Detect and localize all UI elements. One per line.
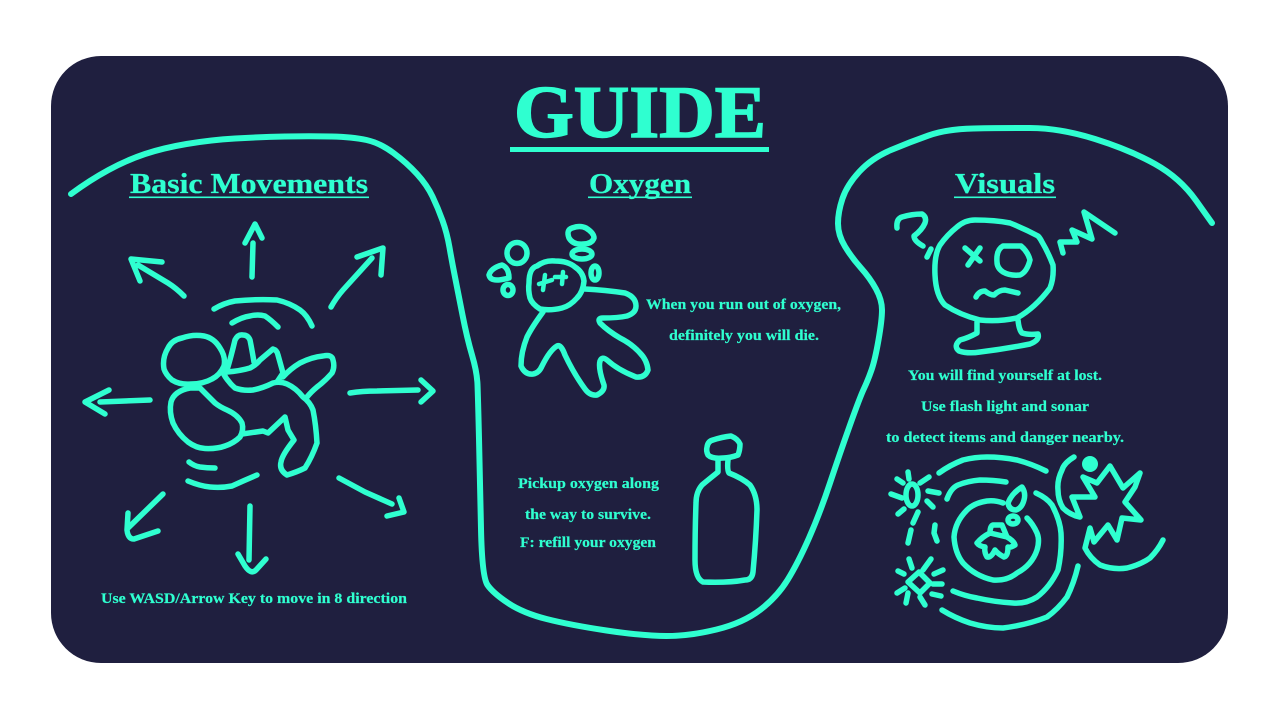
flashlight item [891, 472, 939, 543]
arrow: up-left [131, 259, 184, 296]
caption: out of oxygen: When you run out of oxygen, [646, 297, 841, 313]
arrow: up-right [331, 248, 383, 307]
heading: Oxygen: Oxygen [589, 168, 691, 200]
caption: out of oxygen [646, 297, 841, 344]
bubbles [489, 226, 599, 296]
stand [956, 320, 1038, 353]
caption: pickup oxygen [518, 476, 660, 551]
icon: drowned figure with bubbles [489, 226, 648, 395]
panel: basic movements [85, 168, 433, 607]
arrow: left [85, 390, 150, 414]
figure eyes [539, 272, 566, 290]
mouth [976, 290, 1018, 297]
icon: sonar scene [891, 456, 1163, 628]
icon: swimming diver [164, 300, 334, 487]
eyes [965, 246, 1030, 275]
panel: oxygen [489, 168, 841, 582]
scribble [1060, 212, 1115, 253]
diver body [170, 388, 243, 449]
title: GUIDE: GUIDE [514, 72, 766, 154]
caption: visuals: Use flash light and sonar [921, 399, 1089, 415]
diver arm and torso [223, 373, 317, 475]
diver head [164, 335, 224, 384]
heading: Visuals: Visuals [955, 168, 1055, 200]
icon: confused head [897, 212, 1115, 353]
head outline [935, 220, 1053, 321]
background card [51, 56, 1228, 663]
arrow: right [350, 380, 433, 402]
arrow: down-left [127, 494, 163, 539]
danger creature [1058, 457, 1163, 569]
figure head [529, 261, 584, 310]
caption: pickup oxygen: Pickup oxygen along [518, 476, 660, 492]
caption: visuals [886, 368, 1124, 446]
caption: movement: Use WASD/Arrow Key to move in 8 direction [101, 591, 408, 607]
caption: pickup oxygen: the way to survive. [525, 507, 651, 523]
icon: oxygen bottle [695, 436, 757, 582]
caption: pickup oxygen: F: refill your oxygen [520, 535, 657, 551]
arrow: up [245, 224, 262, 277]
caption: visuals: to detect items and danger nearby. [886, 430, 1124, 446]
hand-drawn section outline [71, 128, 1212, 636]
question mark [897, 214, 931, 257]
center swimmer and item [977, 487, 1025, 557]
figure body [521, 289, 648, 395]
diver fins [227, 335, 334, 397]
arrow: down-right [339, 478, 404, 516]
motion lines [188, 300, 312, 487]
caption: visuals: You will find yourself at lost. [908, 368, 1102, 384]
panel: visuals [886, 168, 1163, 628]
caption: out of oxygen: definitely you will die. [669, 328, 819, 344]
sonar rings [939, 457, 1078, 628]
arrow: down [238, 506, 266, 572]
sunburst item [897, 559, 943, 605]
heading: Basic Movements: Basic Movements [130, 168, 368, 200]
